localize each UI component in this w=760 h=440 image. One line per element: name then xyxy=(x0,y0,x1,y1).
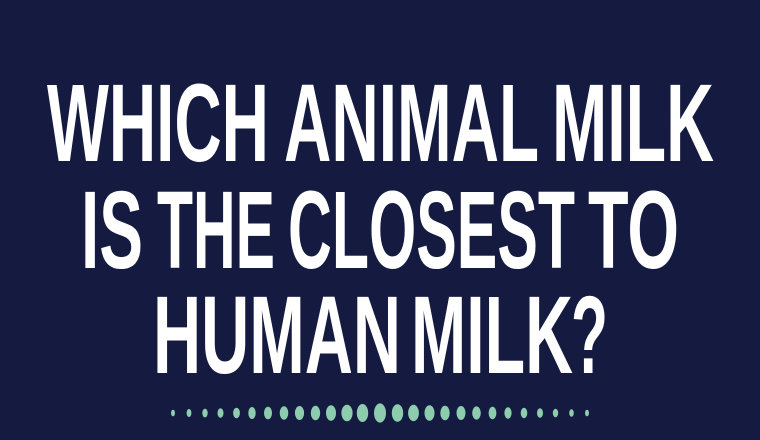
title: ANIMAL xyxy=(284,62,539,185)
dotted divider xyxy=(171,403,589,423)
title: HUMAN xyxy=(153,274,401,397)
title: THE xyxy=(157,169,275,292)
title: MILK xyxy=(411,274,573,397)
title xyxy=(47,62,714,397)
title: TO xyxy=(588,169,679,292)
title: WHICH xyxy=(47,62,269,185)
title: ? xyxy=(571,274,608,397)
title: IS xyxy=(81,169,143,292)
